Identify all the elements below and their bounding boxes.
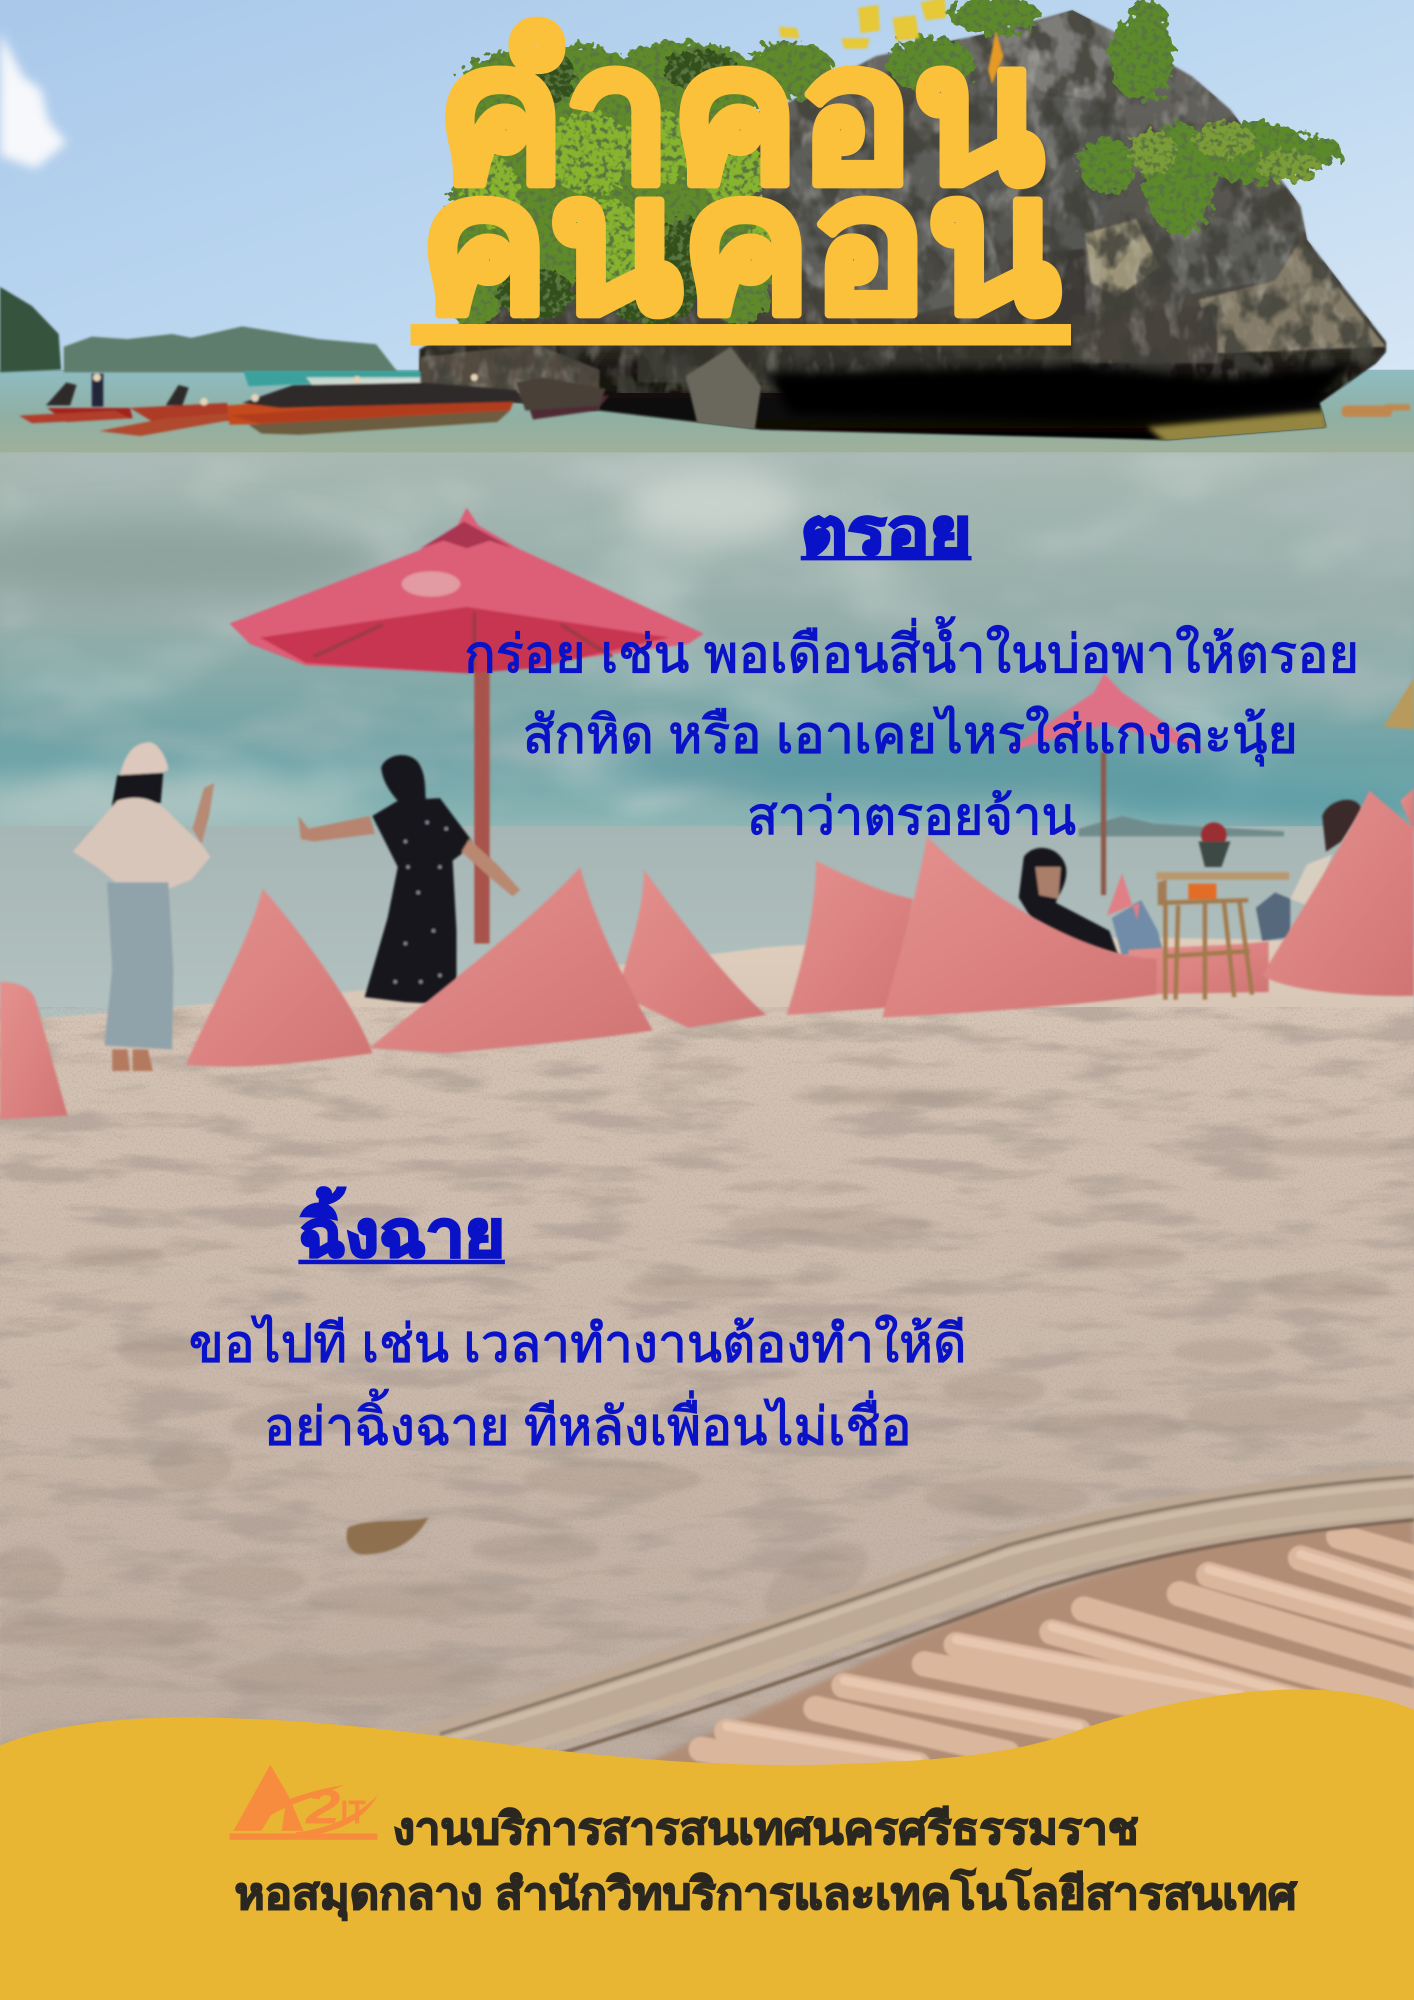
- icon: A2IT logo: 2: [305, 1780, 340, 1834]
- title: คำคอน คนคอน: คำคอน: [437, 7, 1043, 223]
- title: คำคอน คนคอน: คนคอน: [419, 137, 1060, 353]
- sand patches: [0, 1088, 1403, 1697]
- photo: umbrellas: [230, 507, 1206, 944]
- footer wave band: [0, 1689, 1414, 2000]
- photo: bamboo platform: [421, 1476, 1414, 1785]
- text block: ตรอย: สักหิด หรือ เอาเคยไหรใส่แกงละนุ้ย: [523, 705, 1298, 766]
- icon: A2IT logo: IT: [340, 1794, 366, 1831]
- footer text: [235, 1806, 1298, 1922]
- photo: wooden side table: [1163, 900, 1252, 1000]
- icon: A2IT logo: [230, 1765, 377, 1840]
- footer text: งานบริการสารสนเทศนครศรีธรรมราช: [393, 1806, 1139, 1854]
- shell on sand: [346, 1517, 428, 1554]
- photo: seated guests and table: [1019, 678, 1414, 956]
- text block: ตรอย: [464, 495, 1359, 846]
- text block: ตรอย: กร่อย เช่น พอเดือนสี่น้ำในบ่อพาให้ตรอย: [464, 616, 1359, 684]
- heading: ตรอย: ตรอย: [801, 495, 972, 567]
- title: คำคอน คนคอน: [411, 7, 1071, 353]
- text block: ฉิ้งฉาย: ขอไปที เช่น เวลาทำงานต้องทำให้ดี: [189, 1315, 966, 1374]
- header photo: koh rock island: [0, 0, 1414, 453]
- beach photo background: [0, 453, 1414, 1785]
- text block: ตรอย: สาว่าตรอยจ้าน: [747, 788, 1076, 846]
- footer text: หอสมุดกลาง สำนักวิทบริการและเทคโนโลยีสารสนเทศ: [235, 1868, 1298, 1922]
- photo: pink beanbags: [0, 788, 1414, 1119]
- text block: ฉิ้งฉาย: อย่าฉิ้งฉาย ทีหลังเพื่อนไม่เชื่อ: [264, 1389, 912, 1457]
- photo: two women: [73, 742, 520, 1071]
- text block: ฉิ้งฉาย: [189, 1187, 966, 1457]
- heading: ฉิ้งฉาย: ฉิ้งฉาย: [298, 1187, 505, 1270]
